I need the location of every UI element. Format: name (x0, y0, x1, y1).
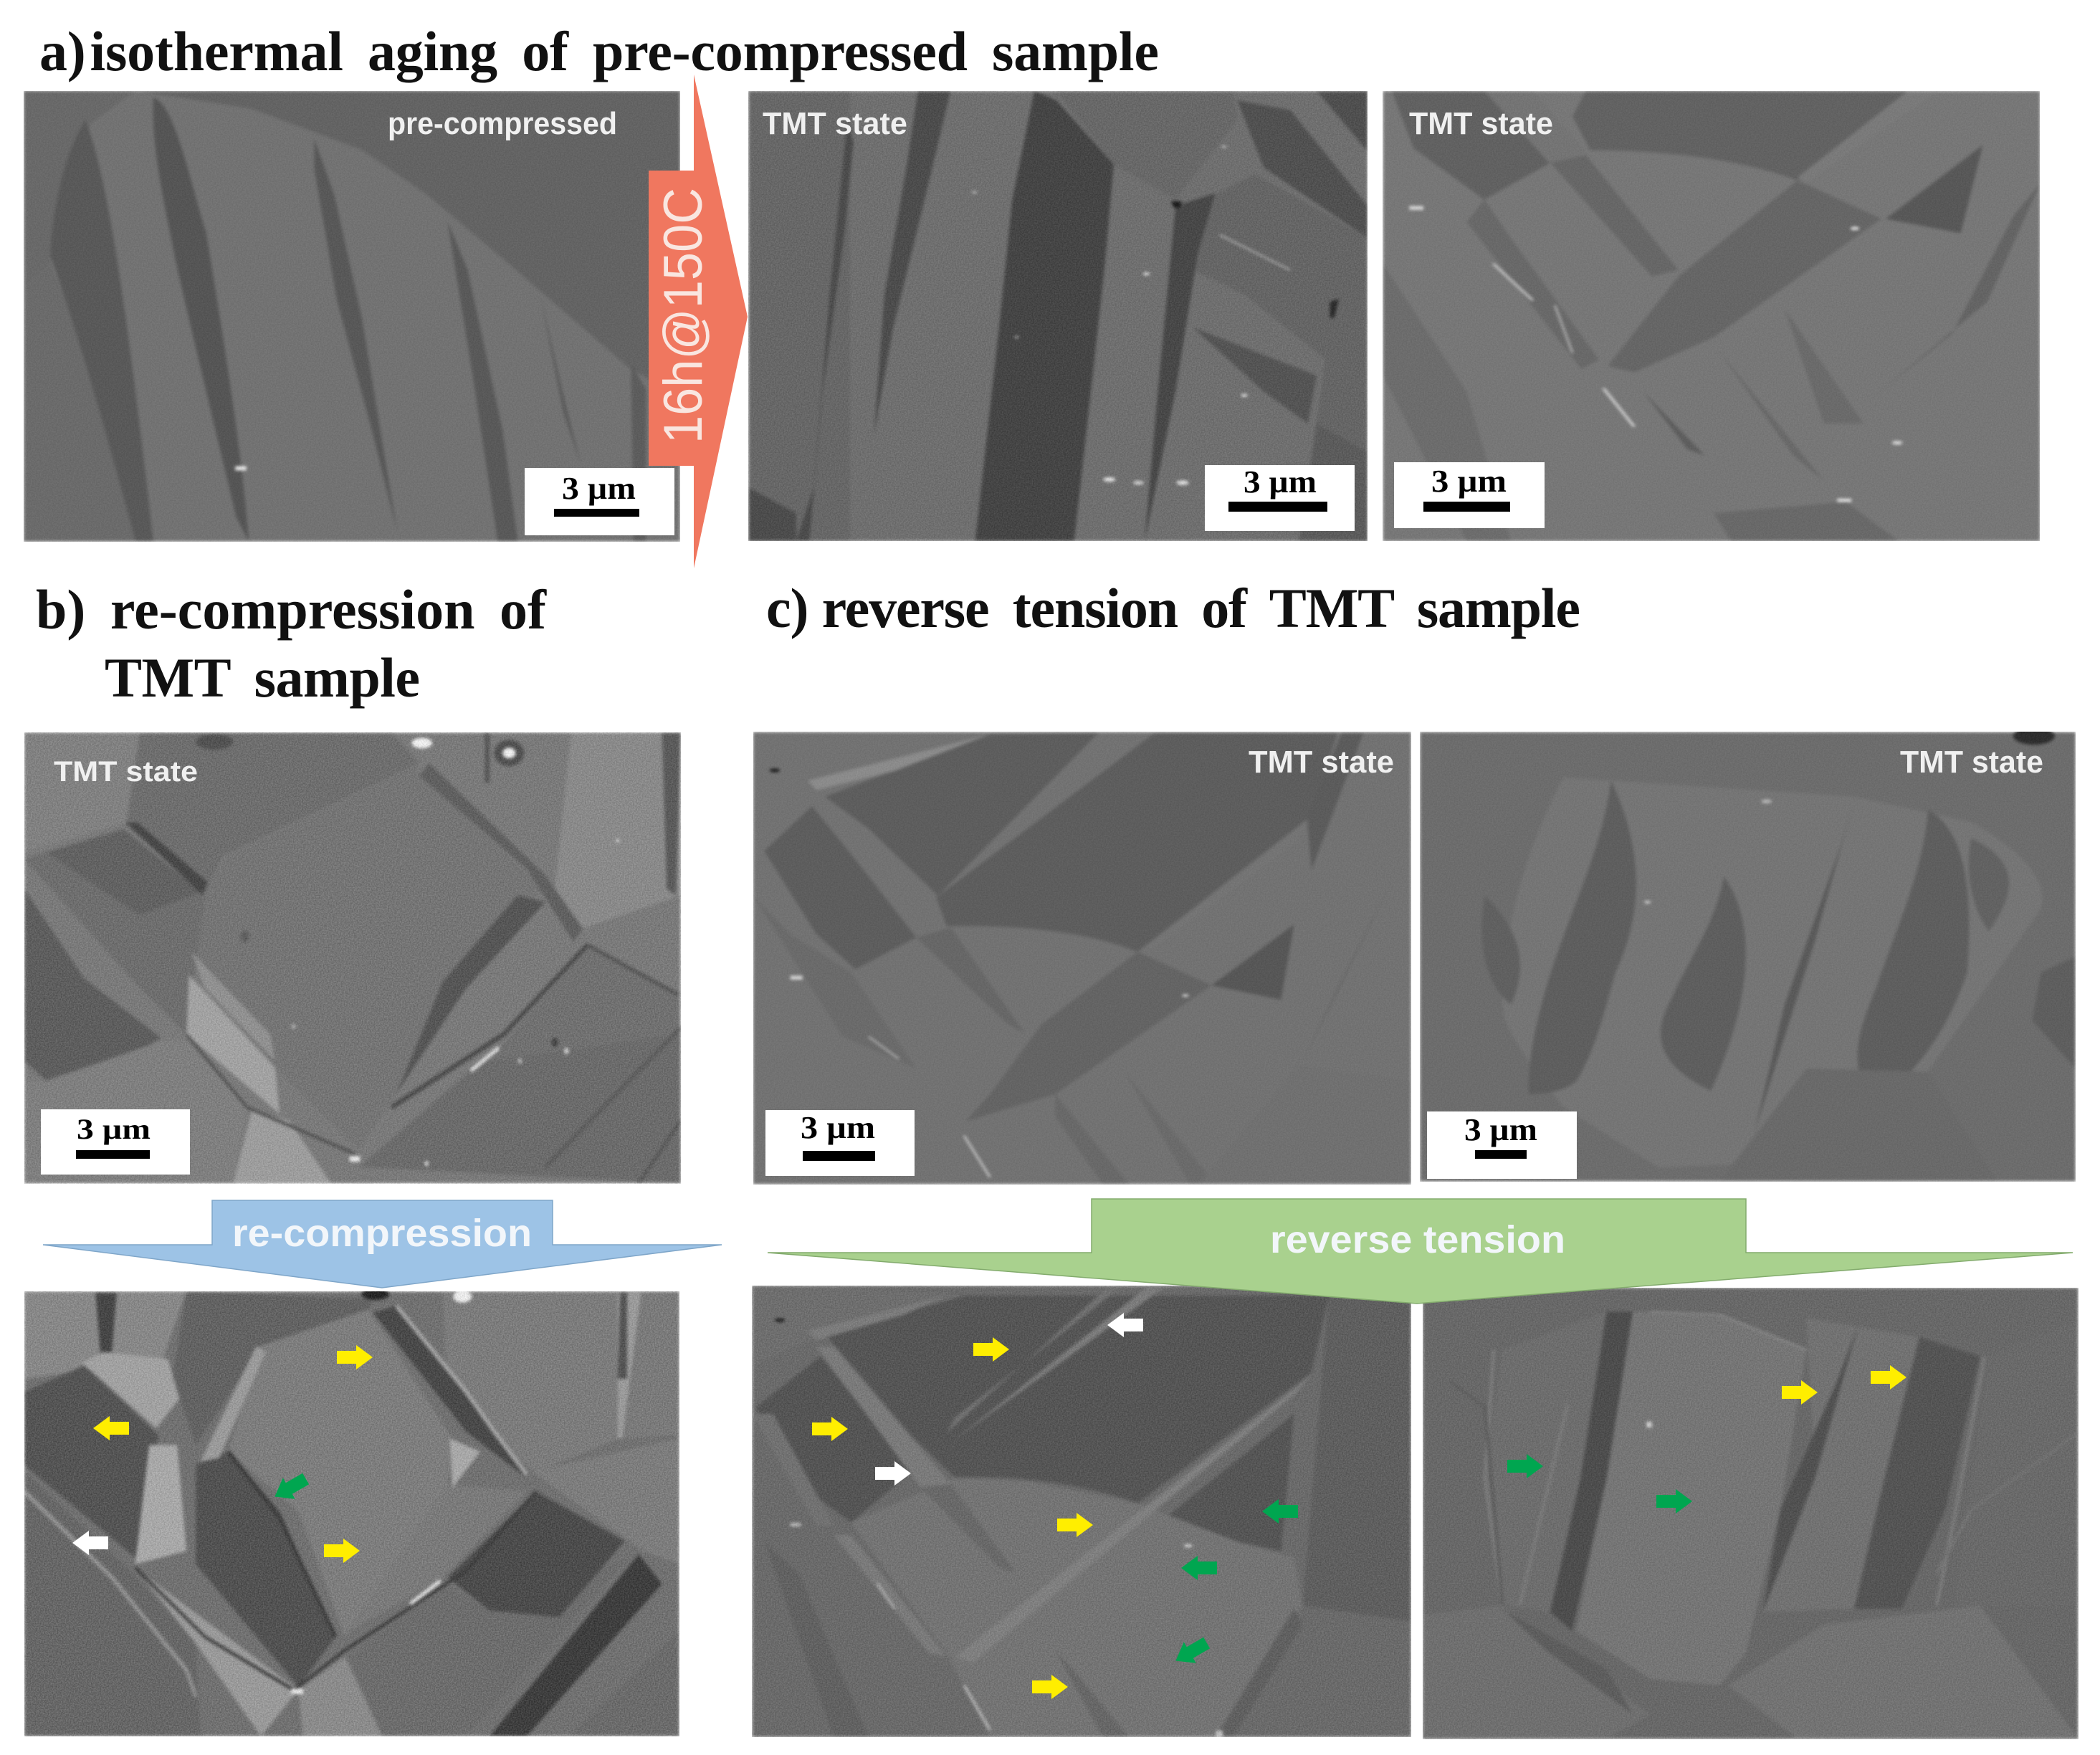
panel: c3 reverse-tension micrograph (752, 1286, 1411, 1737)
scale bar b1: 3 µm (77, 1113, 151, 1145)
label: pre-compressed: pre-compressed (388, 106, 617, 141)
arrow label: reverse tension (1270, 1218, 1565, 1261)
arrow label: 16h@150C (653, 188, 714, 444)
micrograph c3 (752, 1286, 1411, 1737)
arrow label: re-compression (232, 1212, 532, 1255)
panel: c4 reverse-tension micrograph (1423, 1288, 2078, 1739)
arrow: 16h@150C (649, 75, 748, 568)
arrow: green lower-left (269, 1468, 312, 1507)
scale bar a2 (1205, 464, 1355, 531)
scale bar a1: 3 µm (562, 471, 636, 506)
scale bar c1 (765, 1110, 915, 1176)
panel: c1 TMT state micrograph (753, 732, 1411, 1185)
arrow: yellow right (324, 1539, 360, 1563)
heading: c) reverse tension: c) reverse tension of TMT sample (766, 577, 1580, 639)
scale bar c2 (1427, 1111, 1577, 1179)
scale bar a2: 3 µm (1244, 464, 1317, 499)
heading: b) re-compression (36, 578, 547, 709)
arrow: green diagonal (1170, 1632, 1213, 1671)
panel: b1 TMT state micrograph (24, 732, 681, 1184)
micrograph c4 (1423, 1288, 2078, 1739)
micrograph b1 (24, 732, 681, 1184)
arrow: reverse tension (768, 1199, 2073, 1304)
heading: b) re-compression: TMT sample (105, 646, 420, 709)
panel: a1 pre-compressed micrograph (24, 91, 680, 542)
scale bar a3 (1394, 462, 1545, 528)
arrow: green right (1507, 1454, 1543, 1478)
scale bar b1 (41, 1109, 190, 1175)
label: TMT state: TMT state (763, 106, 907, 141)
micrograph a1 (24, 91, 680, 542)
arrow: yellow right (1057, 1513, 1093, 1537)
micrograph b2 (24, 1288, 679, 1736)
arrow: yellow right (973, 1337, 1009, 1362)
micrograph c2 (1420, 727, 2076, 1182)
arrow: yellow right (1871, 1365, 1906, 1390)
heading: b) re-compression: b) re-compression of (36, 578, 547, 641)
panel: a3 TMT state micrograph (1383, 91, 2040, 541)
panel: a2 TMT state micrograph (748, 91, 1368, 541)
arrow: yellow right (337, 1345, 373, 1369)
label: TMT state: TMT state (1900, 745, 2043, 780)
scale bar c1: 3 µm (801, 1110, 875, 1145)
scale bar a1 (525, 468, 674, 535)
arrow: yellow right (1032, 1675, 1068, 1699)
micrograph c1 (753, 732, 1411, 1185)
arrow: yellow right (812, 1417, 848, 1441)
arrow: yellow left (93, 1416, 129, 1440)
label: TMT state: TMT state (1409, 106, 1553, 141)
heading: a) isothermal aging: a)isothermal aging of pre-compressed sample (39, 20, 1159, 82)
micrograph a3 (1383, 91, 2040, 541)
arrow: yellow right (1782, 1380, 1818, 1405)
arrow: white left (72, 1531, 108, 1555)
label: TMT state: TMT state (54, 756, 198, 788)
panel: c2 TMT state micrograph (1420, 727, 2076, 1182)
label: TMT state: TMT state (1249, 745, 1394, 780)
arrow: white left (1107, 1313, 1143, 1337)
arrow: green left (1262, 1499, 1298, 1524)
scale bar c2: 3 µm (1464, 1112, 1537, 1147)
arrow: green right (1656, 1489, 1692, 1513)
scale bar a3: 3 µm (1431, 464, 1507, 499)
arrow: white right (875, 1461, 911, 1486)
arrow: green left (1181, 1556, 1217, 1580)
panel: b2 re-compressed micrograph (24, 1288, 679, 1736)
arrow: re-compression (43, 1200, 722, 1288)
micrograph a2 (748, 91, 1368, 541)
